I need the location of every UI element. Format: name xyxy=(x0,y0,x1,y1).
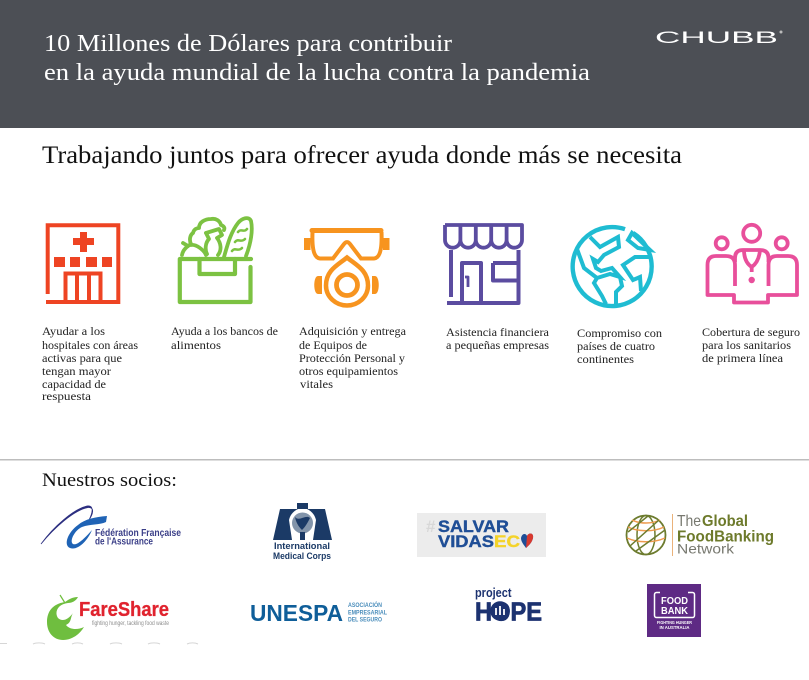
caption: food banks: alimentos xyxy=(171,340,222,352)
logo: Salvar Vidas EC: EC xyxy=(494,533,520,551)
logo: Unespa: UNESPA xyxy=(250,600,343,626)
logo: FareShare: fighting hunger, tackling food waste xyxy=(92,621,170,627)
logo: Chubb xyxy=(655,29,782,47)
caption: food banks: Ayuda a los bancos de xyxy=(171,326,278,338)
icon: food basket xyxy=(180,218,252,302)
icon: people xyxy=(708,225,797,302)
caption: protective equipment xyxy=(299,326,406,391)
logo: Salvar Vidas EC: # xyxy=(426,517,436,536)
logo: International Medical Corps xyxy=(273,503,332,562)
caption: four continents: continentes xyxy=(577,354,635,366)
logo: International Medical Corps: Medical Corps xyxy=(273,551,331,562)
caption: health workers xyxy=(702,327,800,365)
caption: hospitals: capacidad de xyxy=(42,379,106,391)
icon: hospital xyxy=(46,225,118,302)
logo: Food Bank: BANK xyxy=(661,606,689,617)
caption: hospitals: hospitales con áreas xyxy=(42,340,139,352)
icon: storefront xyxy=(445,225,522,303)
logo: Salvar Vidas EC: SALVAR xyxy=(438,518,509,536)
logo: Food Bank: FIGHTING HUNGER xyxy=(657,620,693,625)
logo: The Global FoodBanking Network: The xyxy=(677,513,701,530)
caption: hospitals: activas para que xyxy=(42,353,122,365)
logo: Unespa: ASOCIACIÓN xyxy=(348,600,382,609)
logo: The Global FoodBanking Network: Network xyxy=(677,540,735,556)
caption: protective equipment: Adquisición y entrega xyxy=(299,326,406,338)
logo: Fédération Française de l'Assurance: de l'Assurance xyxy=(95,536,153,548)
caption: protective equipment: vitales xyxy=(300,379,334,391)
header band xyxy=(0,0,809,128)
logo: Unespa: DEL SEGURO xyxy=(348,616,382,624)
caption: health workers: Cobertura de seguro xyxy=(702,327,800,339)
logo: Food Bank: IN AUSTRALIA xyxy=(660,625,690,630)
caption: small business: a pequeñas empresas xyxy=(446,340,550,352)
title: 10 Millones de Dólares para contribuir xyxy=(44,31,452,57)
logo: Project Hope: project xyxy=(475,585,512,600)
icon: globe xyxy=(573,227,652,306)
caption: protective equipment: Protección Personal y xyxy=(299,353,405,365)
logo: Project Hope: HOPE xyxy=(475,596,542,626)
logo: Chubb: CHUBB xyxy=(655,29,778,47)
logo: Unespa: EMPRESARIAL xyxy=(348,610,387,616)
logo: International Medical Corps: International xyxy=(274,541,330,552)
section heading: Trabajando juntos para ofrecer ayuda donde más se necesita xyxy=(42,140,682,169)
caption: protective equipment: otros equipamientos xyxy=(299,366,399,378)
logo: Fédération Française de l'Assurance xyxy=(41,506,181,549)
logo: Fédération Française de l'Assurance: Fédération Française xyxy=(95,528,181,539)
logo: The Global FoodBanking Network: Global xyxy=(702,513,748,530)
caption: small business: Asistencia financiera xyxy=(446,327,549,339)
icon: goggles and mask xyxy=(304,230,390,306)
logo: FareShare xyxy=(47,595,170,640)
partners heading: Nuestros socios: xyxy=(42,471,177,491)
caption: hospitals xyxy=(42,326,139,403)
logo: The Global FoodBanking Network: FoodBanking xyxy=(677,528,774,546)
caption: hospitals: Ayudar a los xyxy=(42,326,106,338)
caption: small business xyxy=(446,327,550,352)
caption: four continents: Compromiso con xyxy=(577,328,662,340)
caption: hospitals: respuesta xyxy=(42,391,91,403)
caption: health workers: para los sanitarios xyxy=(702,340,792,352)
caption: protective equipment: de Equipos de xyxy=(299,340,367,352)
title: en la ayuda mundial de la lucha contra la pandemia xyxy=(44,60,590,86)
logo: Project Hope xyxy=(475,585,542,626)
title xyxy=(44,31,590,86)
caption: four continents: países de cuatro xyxy=(577,341,655,353)
caption: food banks xyxy=(171,326,278,352)
caption: four continents xyxy=(577,328,662,366)
caption: hospitals: tengan mayor xyxy=(42,366,111,378)
logo: Salvar Vidas EC xyxy=(417,513,546,557)
logo: The Global FoodBanking Network xyxy=(626,513,774,556)
logo: FareShare: FareShare xyxy=(79,599,169,621)
logo: Food Bank: FOOD xyxy=(661,596,688,607)
logo: Food Bank xyxy=(647,584,701,637)
caption: health workers: de primera línea xyxy=(702,353,783,365)
logo: Salvar Vidas EC: VIDAS xyxy=(438,533,494,551)
